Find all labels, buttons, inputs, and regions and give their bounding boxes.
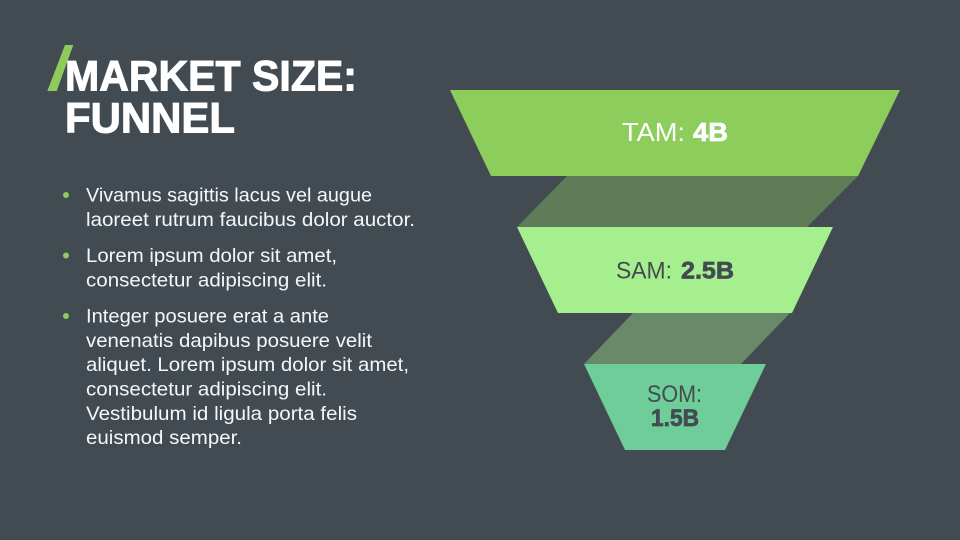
funnel tier: SOM: SOM: (647, 381, 702, 408)
bullet 3 (63, 306, 409, 449)
title line 2: FUNNEL (65, 94, 235, 142)
bullet 2: Lorem ipsum dolor sit amet, (86, 245, 337, 267)
funnel tier: SAM (517, 227, 833, 313)
bullet 3: euismod semper. (86, 427, 242, 449)
bullet 1 (63, 184, 415, 231)
bullet 3: Integer posuere erat a ante (86, 306, 329, 328)
bullet 2: consectetur adipiscing elit. (86, 270, 327, 292)
bullet 3: Vestibulum id ligula porta felis (86, 403, 357, 425)
funnel chart (450, 90, 900, 450)
icon: green slash accent (47, 45, 73, 91)
bullet 1: laoreet rutrum faucibus dolor auctor. (86, 209, 415, 231)
bullet list (63, 184, 415, 449)
bullet 1: Vivamus sagittis lacus vel augue (86, 184, 372, 206)
bullet 2 (63, 245, 337, 292)
funnel tier: TAM: TAM: (622, 117, 685, 147)
funnel tier: SAM: 2.5B (681, 258, 734, 284)
connector: SAM to SOM (584, 313, 790, 364)
title line 1: MARKET SIZE: (65, 52, 357, 100)
funnel tier: TAM: 4B (693, 117, 728, 147)
bullet 3: venenatis dapibus posuere velit (86, 330, 373, 352)
funnel tier: SOM: 1.5B (651, 405, 699, 432)
connector: TAM to SAM (517, 176, 858, 227)
bullet 3: aliquet. Lorem ipsum dolor sit amet, (86, 354, 409, 376)
funnel tier: SOM (584, 364, 766, 450)
bullet 3: consectetur adipiscing elit. (86, 378, 327, 400)
funnel tier: SAM: SAM: (616, 258, 672, 284)
funnel tier: TAM (450, 90, 900, 176)
title block (47, 45, 357, 142)
